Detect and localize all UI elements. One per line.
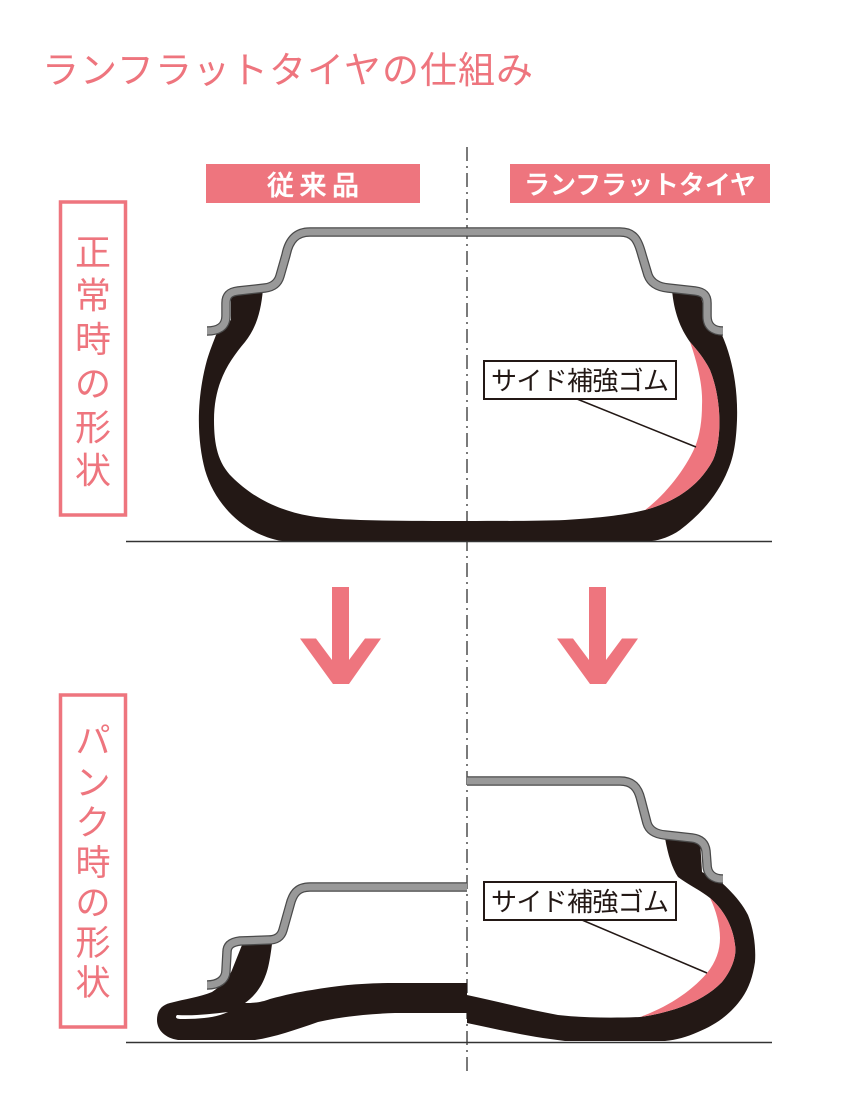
ground line: normal	[126, 540, 772, 542]
label box: puncture shape: 時	[75, 844, 111, 883]
arrow: left down	[300, 587, 381, 684]
callout: side reinforcing rubber, punctured: サイド補強ゴム	[491, 887, 669, 917]
label box: normal shape: 形	[75, 407, 111, 448]
header: run-flat tire: ランフラットタイヤ	[524, 170, 756, 200]
tire: conventional, normal	[199, 232, 468, 541]
title: ランフラットタイヤの仕組み	[42, 50, 533, 91]
header: run-flat tire	[510, 164, 770, 203]
label box: normal shape: 時	[75, 319, 111, 360]
label box: puncture shape: ン	[75, 764, 111, 803]
wheel rim: conventional, normal	[207, 232, 468, 331]
label box: normal shape: 常	[75, 275, 111, 316]
label box: normal shape: 正	[75, 232, 111, 273]
label box: puncture shape: 状	[75, 964, 111, 1003]
tire: run-flat, normal	[466, 232, 737, 541]
reinforcing rubber: punctured	[640, 898, 735, 1017]
label box: puncture shape: ク	[75, 804, 111, 843]
wheel rim: run-flat, punctured	[467, 781, 723, 879]
label box: puncture shape: 形	[75, 924, 111, 963]
header: conventional tire: 従来品	[267, 171, 359, 201]
ground line: punctured	[126, 1042, 772, 1044]
wheel rim: run-flat, normal	[466, 232, 723, 331]
label box: normal shape: の	[75, 363, 111, 404]
label box: normal shape	[60, 202, 126, 515]
header: conventional tire	[206, 164, 420, 203]
tire: conventional, punctured	[157, 887, 467, 1040]
label box: puncture shape	[60, 695, 126, 1027]
callout: side reinforcing rubber, normal	[484, 361, 696, 447]
label box: normal shape: 状	[75, 450, 111, 491]
wheel rim: conventional, punctured	[207, 887, 467, 985]
label box: puncture shape: の	[75, 884, 111, 923]
callout: side reinforcing rubber, punctured	[484, 882, 707, 973]
label box: puncture shape: パ	[75, 722, 111, 761]
callout: side reinforcing rubber, normal: サイド補強ゴム	[491, 366, 669, 396]
arrow: right down	[557, 587, 638, 684]
tire: run-flat, punctured	[467, 781, 755, 1041]
center dash-dot axis	[466, 147, 468, 1072]
reinforcing rubber: normal	[645, 342, 719, 510]
